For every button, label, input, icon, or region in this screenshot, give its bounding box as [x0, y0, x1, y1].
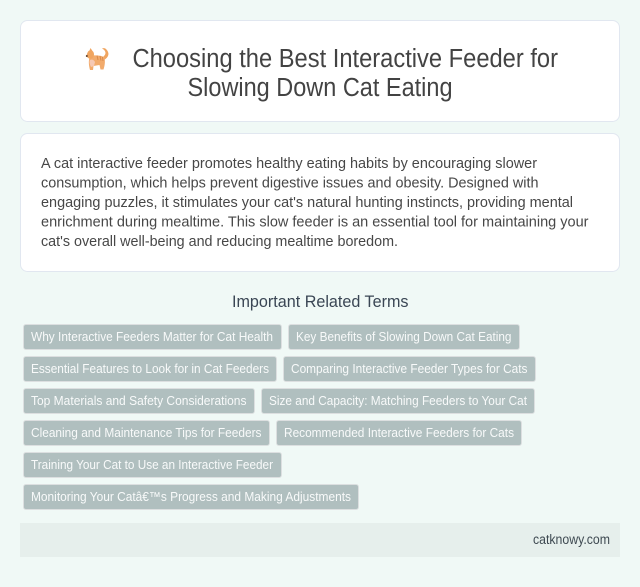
tag: materials and safety: Top Materials and Safety Considerations	[31, 393, 246, 408]
tag: key benefits: Key Benefits of Slowing Down Cat Eating	[296, 329, 512, 344]
tag list	[24, 324, 536, 510]
tag: training: Training Your Cat to Use an Interactive Feeder	[31, 457, 274, 472]
tag: key benefits	[288, 324, 520, 350]
text block: description: enrichment during mealtime. This slow feeder is an essential tool for maintaining your	[41, 214, 589, 230]
tag: size and capacity: Size and Capacity: Matching Feeders to Your Cat	[269, 393, 527, 408]
tag: cleaning	[24, 420, 270, 446]
tag: recommended	[276, 420, 522, 446]
icon: cat	[86, 48, 108, 70]
tag: comparing types: Comparing Interactive Feeder Types for Cats	[291, 361, 528, 376]
tag: essential features: Essential Features to Look for in Cat Feeders	[31, 361, 269, 376]
text block: description: cat's overall well-being and reducing mealtime boredom.	[41, 234, 398, 250]
tag: why feeders matter	[24, 324, 282, 350]
panel: title card	[20, 20, 620, 122]
text block: description: engaging puzzles, it stimulates your cat's natural hunting instincts, providing mental	[41, 195, 573, 211]
tag: training	[24, 452, 282, 478]
text block: description: A cat interactive feeder promotes healthy eating habits by encouraging slower	[41, 156, 537, 172]
tag: why feeders matter: Why Interactive Feeders Matter for Cat Health	[31, 329, 273, 344]
title	[132, 45, 558, 102]
footer	[20, 523, 620, 557]
tag: recommended: Recommended Interactive Feeders for Cats	[284, 425, 514, 440]
heading: related terms: Important Related Terms	[232, 293, 408, 311]
text block: description: consumption, which helps prevent digestive issues and obesity. Designed with	[41, 176, 538, 192]
title: Choosing the Best Interactive Feeder for	[132, 45, 558, 73]
tag: comparing types	[284, 356, 536, 382]
title: Slowing Down Cat Eating	[188, 74, 452, 102]
tag: size and capacity	[262, 388, 534, 414]
tag: materials and safety	[24, 388, 254, 414]
tag: monitoring	[24, 484, 358, 510]
text block: description	[41, 156, 589, 250]
tag: essential features	[24, 356, 276, 382]
footer: catknowy.com	[533, 532, 610, 547]
tag: cleaning: Cleaning and Maintenance Tips for Feeders	[31, 425, 262, 440]
panel: description	[20, 134, 620, 272]
tag: monitoring: Monitoring Your Catâ€™s Progress and Making Adjustments	[31, 489, 351, 504]
